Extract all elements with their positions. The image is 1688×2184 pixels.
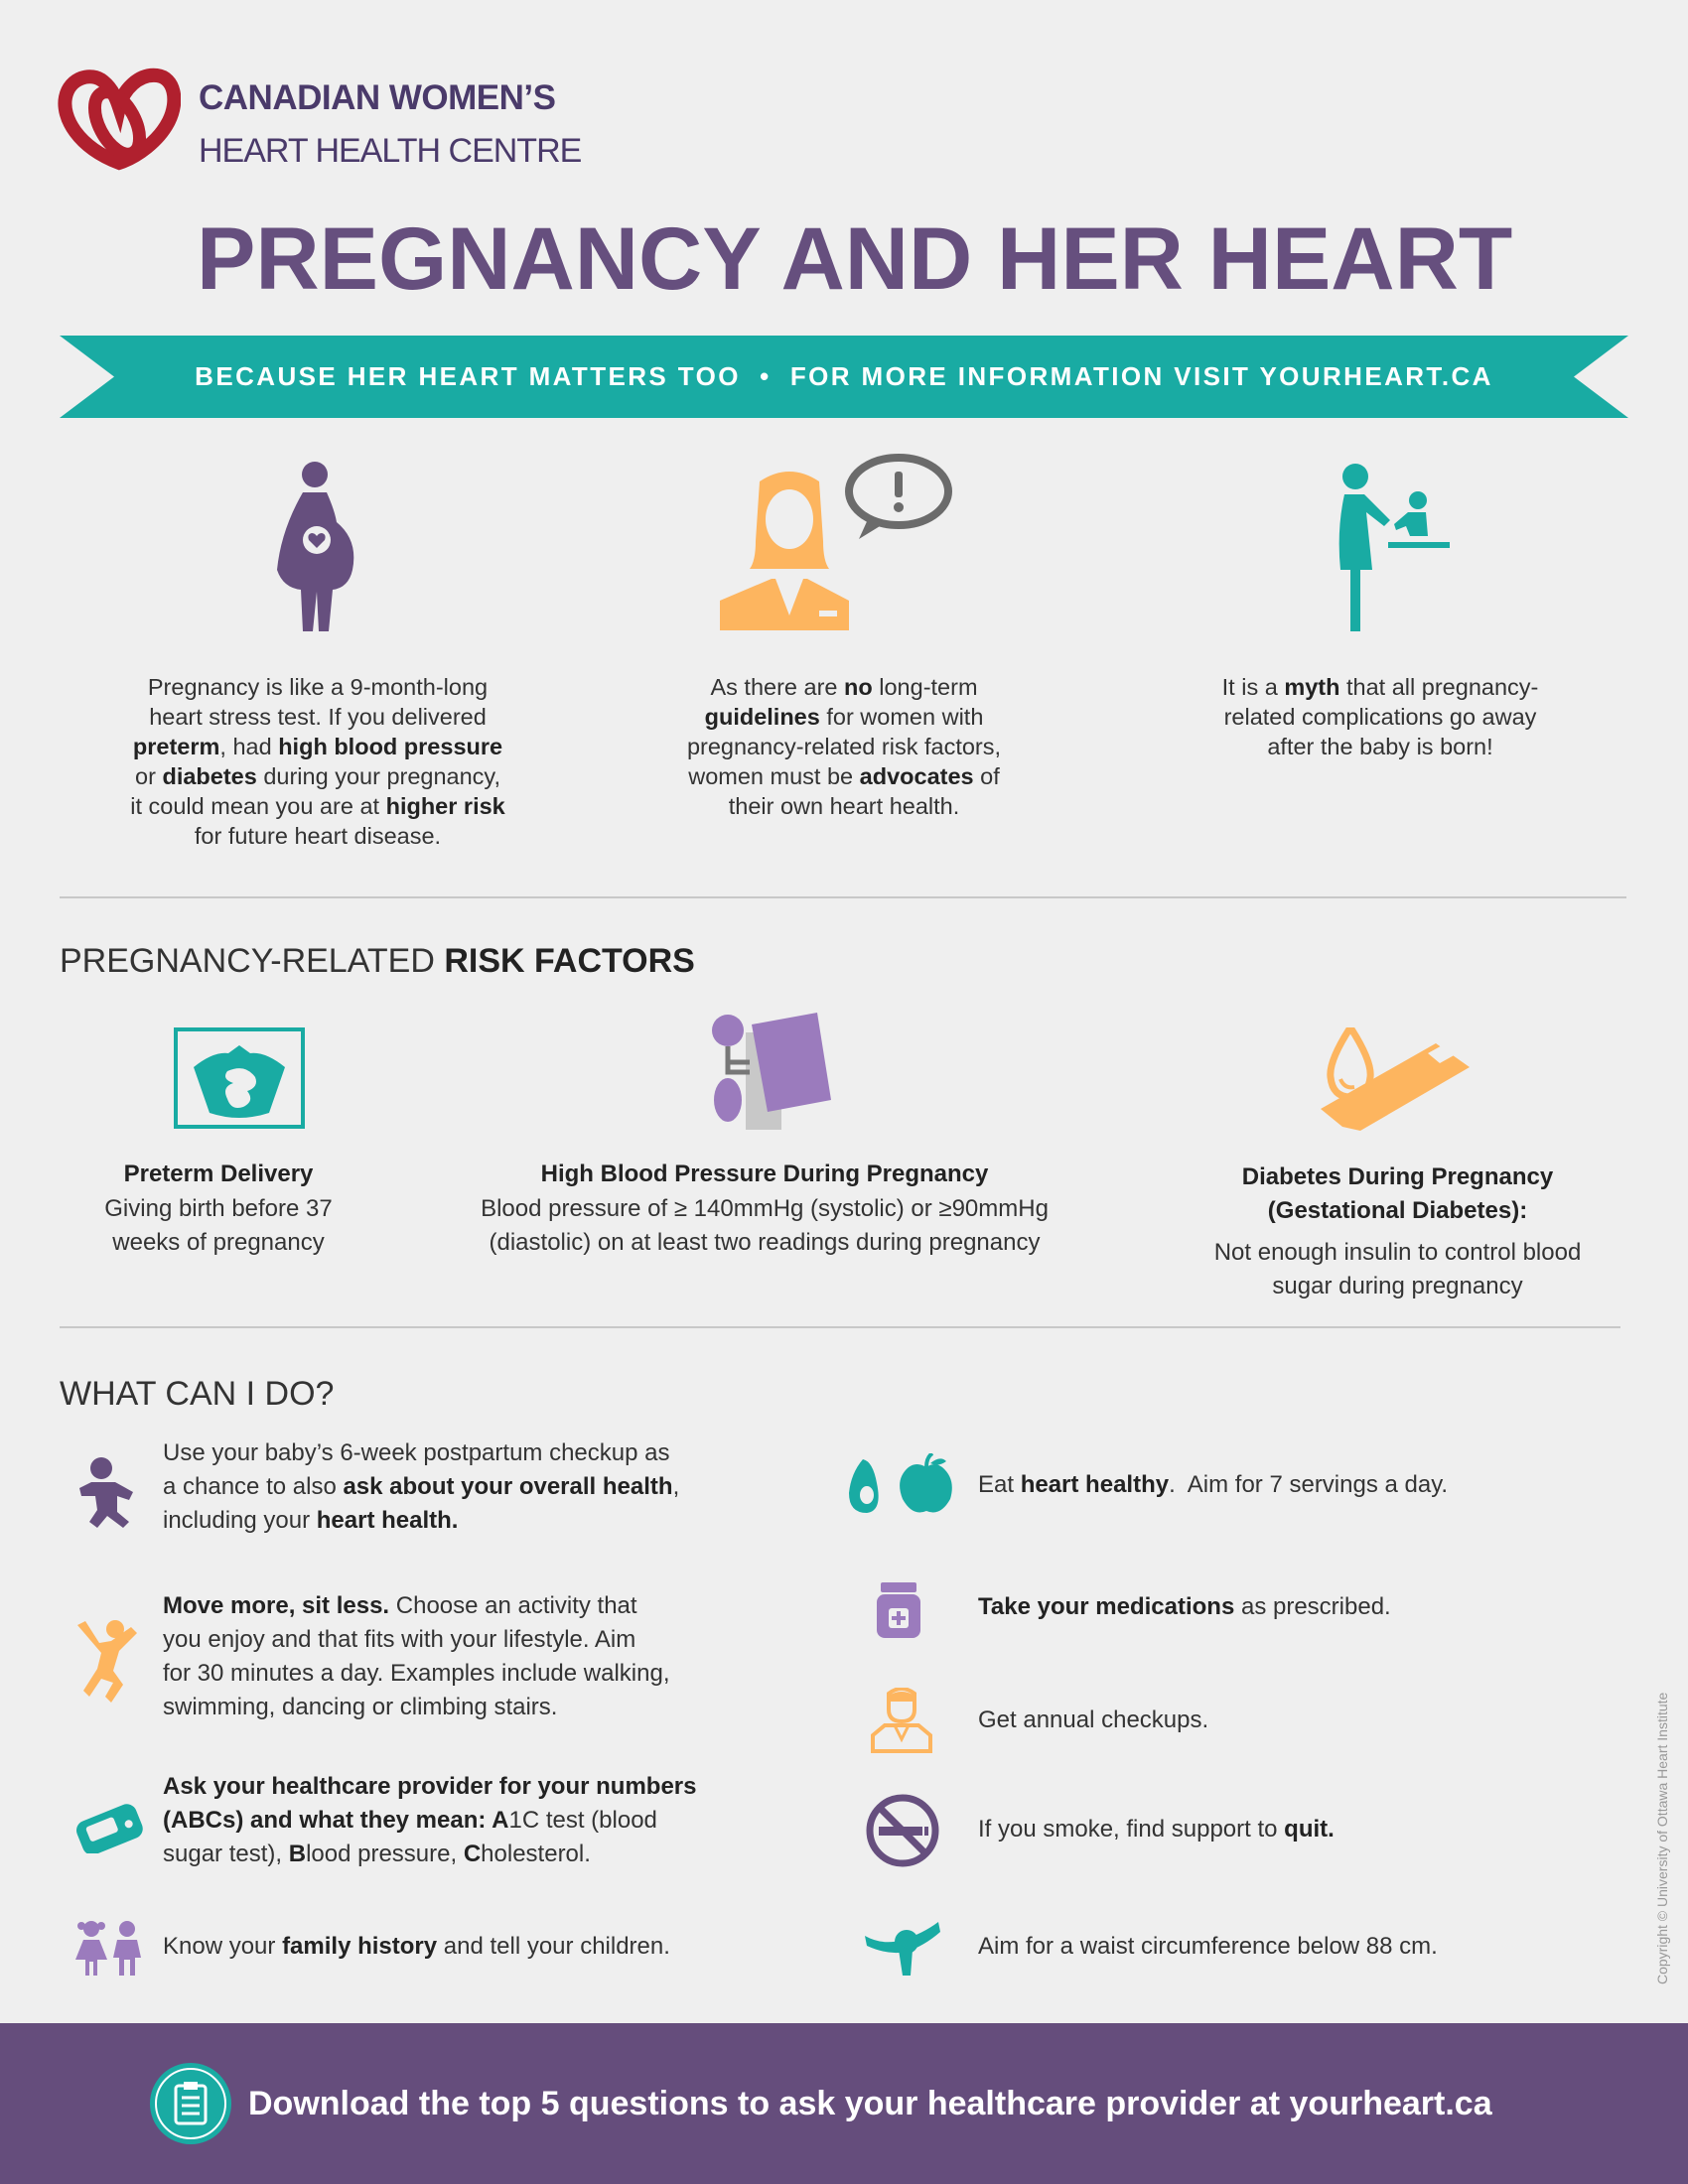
panel: guidelines xyxy=(687,454,1001,819)
icon: jumping person xyxy=(77,1620,137,1703)
text: related complications go away xyxy=(1224,704,1536,730)
text: guidelines for women with xyxy=(705,704,983,730)
item: family history xyxy=(75,1921,670,1976)
copyright: Copyright © University of Ottawa Heart Institute xyxy=(1654,1693,1670,1984)
panel: diabetes xyxy=(1214,1027,1581,1299)
text: Pregnancy is like a 9-month-long xyxy=(148,674,488,700)
icon: ultrasound xyxy=(174,1027,305,1129)
icon: pill bottle xyxy=(877,1582,920,1638)
logo text: CANADIAN WOMEN’S xyxy=(199,78,555,117)
logo text: HEART HEALTH CENTRE xyxy=(199,132,581,170)
icon: heart loops xyxy=(58,68,181,171)
icon: baby xyxy=(79,1457,133,1528)
text: for 30 minutes a day. Examples include walking, xyxy=(163,1660,669,1687)
icon: drop and test strip xyxy=(1321,1027,1470,1131)
icon: woman with speech bubble xyxy=(720,454,952,630)
banner xyxy=(60,336,1628,418)
text: High Blood Pressure During Pregnancy xyxy=(541,1160,988,1187)
text: their own heart health. xyxy=(729,793,959,819)
text xyxy=(481,1160,1049,1256)
logo text xyxy=(199,78,581,170)
text: Eat heart healthy. Aim for 7 servings a day. xyxy=(978,1471,1448,1498)
item: waist xyxy=(839,1916,1574,1979)
icon: doctor xyxy=(871,1688,932,1753)
text: Blood pressure of ≥ 140mmHg (systolic) or ≥90mmHg xyxy=(481,1195,1049,1222)
text: As there are no long-term xyxy=(710,674,978,700)
text xyxy=(687,674,1001,819)
text: for future heart disease. xyxy=(195,823,441,849)
text: it could mean you are at higher risk xyxy=(130,793,505,819)
text: swimming, dancing or climbing stairs. xyxy=(163,1694,557,1720)
banner: BECAUSE HER HEART MATTERS TOO • FOR MORE INFORMATION VISIT YOURHEART.CA xyxy=(195,361,1493,391)
icon: clipboard xyxy=(149,2062,232,2145)
text: Giving birth before 37 xyxy=(104,1195,333,1222)
text: (diastolic) on at least two readings during pregnancy xyxy=(489,1229,1040,1256)
text: preterm, had high blood pressure xyxy=(133,734,502,759)
panel: stress test xyxy=(130,462,505,849)
text xyxy=(1222,674,1538,759)
text: a chance to also ask about your overall health, xyxy=(163,1473,679,1500)
text: Get annual checkups. xyxy=(978,1706,1208,1733)
text: weeks of pregnancy xyxy=(112,1229,325,1256)
icon: BP monitor xyxy=(712,1013,831,1130)
text xyxy=(163,1773,696,1867)
text: Move more, sit less. Choose an activity that xyxy=(163,1592,637,1619)
footer text: Download the top 5 questions to ask your healthcare provider at yourheart.ca xyxy=(248,2085,1492,2122)
icon: measuring tape xyxy=(863,1916,942,1978)
text: after the baby is born! xyxy=(1267,734,1493,759)
text: Use your baby’s 6-week postpartum checkup as xyxy=(163,1439,669,1466)
text: (ABCs) and what they mean: A1C test (blood xyxy=(163,1807,657,1834)
icon: no smoking xyxy=(865,1793,940,1868)
text: you enjoy and that fits with your lifestyle. Aim xyxy=(163,1626,635,1653)
item: checkups xyxy=(839,1688,1574,1753)
text: Preterm Delivery xyxy=(124,1160,313,1187)
text: (Gestational Diabetes): xyxy=(1268,1197,1527,1224)
panel: blood pressure xyxy=(481,1013,1049,1256)
text: women must be advocates of xyxy=(688,763,1000,789)
text: Aim for a waist circumference below 88 cm. xyxy=(978,1933,1438,1960)
icon: mother and baby xyxy=(1338,464,1450,631)
text: If you smoke, find support to quit. xyxy=(978,1816,1335,1843)
icon: glucometer xyxy=(76,1804,143,1853)
text: It is a myth that all pregnancy- xyxy=(1222,674,1538,700)
text xyxy=(163,1439,679,1534)
icon: children xyxy=(75,1921,141,1976)
text: sugar test), Blood pressure, Cholesterol. xyxy=(163,1841,591,1867)
text: heart stress test. If you delivered xyxy=(149,704,487,730)
item: move more xyxy=(77,1592,669,1720)
panel: myth xyxy=(1222,464,1538,759)
item: postpartum checkup xyxy=(79,1439,679,1534)
text xyxy=(1214,1163,1581,1299)
text: Diabetes During Pregnancy xyxy=(1242,1163,1553,1190)
item: ABCs xyxy=(76,1773,696,1867)
text: Ask your healthcare provider for your numbers xyxy=(163,1773,696,1800)
text xyxy=(104,1160,333,1256)
title: PREGNANCY AND HER HEART xyxy=(197,208,1512,308)
text xyxy=(130,674,505,849)
text xyxy=(163,1592,669,1720)
heading: risk factors: PREGNANCY-RELATED RISK FACTORS xyxy=(60,942,695,980)
text: Know your family history and tell your children. xyxy=(163,1933,670,1960)
heading: what can I do: WHAT CAN I DO? xyxy=(60,1375,334,1413)
text: sugar during pregnancy xyxy=(1272,1273,1523,1299)
footer xyxy=(0,2023,1688,2184)
item: medications xyxy=(877,1582,1391,1638)
text: or diabetes during your pregnancy, xyxy=(135,763,500,789)
text: pregnancy-related risk factors, xyxy=(687,734,1001,759)
icon: avocado and apple xyxy=(849,1453,952,1513)
text: Not enough insulin to control blood xyxy=(1214,1239,1581,1266)
text: including your heart health. xyxy=(163,1507,458,1534)
logo xyxy=(58,68,581,171)
panel: preterm xyxy=(104,1027,333,1256)
item: eat healthy xyxy=(849,1453,1448,1513)
icon: pregnant woman xyxy=(277,462,353,631)
text: Take your medications as prescribed. xyxy=(978,1593,1391,1620)
item: quit smoking xyxy=(839,1793,1574,1868)
